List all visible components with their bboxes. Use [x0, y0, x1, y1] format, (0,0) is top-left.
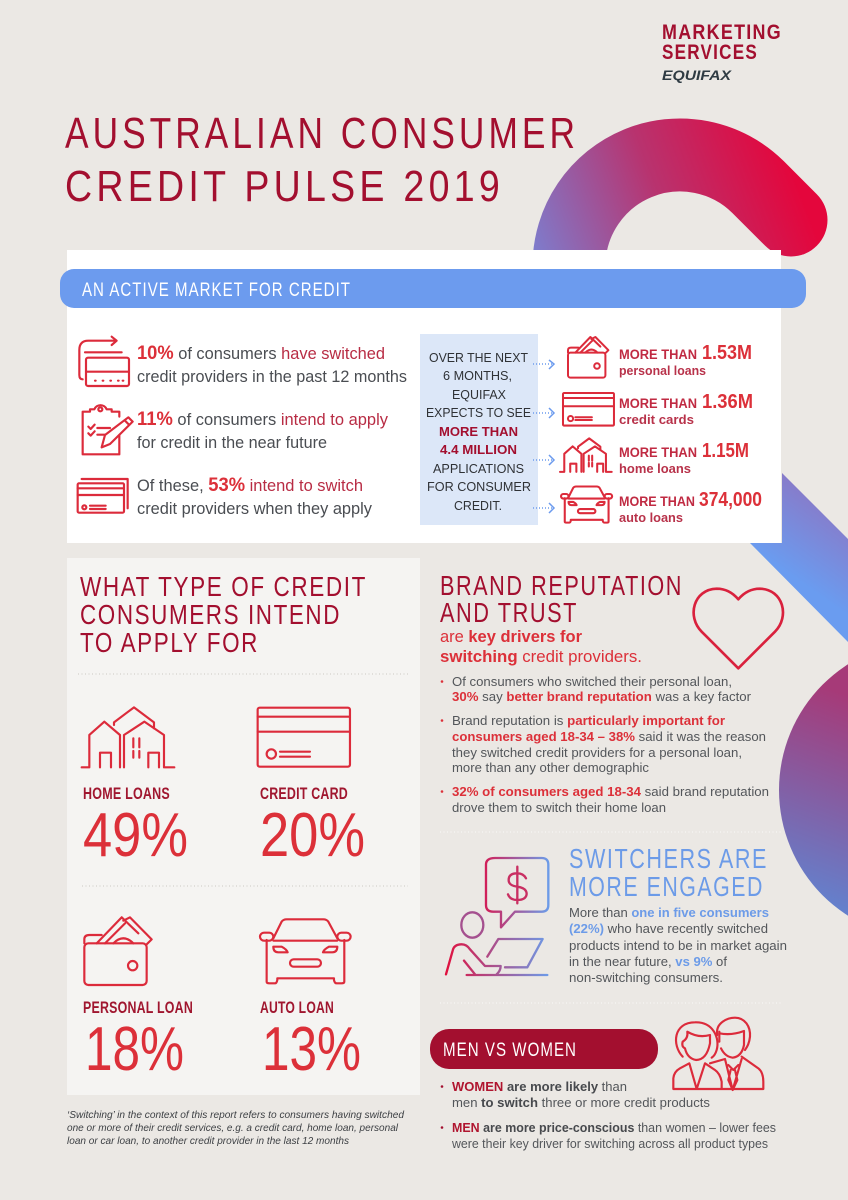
heading bar: an active market for credit: AN ACTIVE MARKET FOR CREDIT [82, 280, 351, 301]
heading bar: men vs women [430, 1029, 658, 1069]
icon: homes small [560, 438, 612, 472]
stat: credit cards: 1.36M [702, 391, 753, 413]
text: one in five consumers [569, 905, 787, 985]
stat: 10 percent switched: credit providers in the past 12 months [137, 367, 407, 386]
icon: man and woman [673, 1018, 763, 1090]
title: CREDIT PULSE 2019 [65, 162, 504, 211]
logo: Marketing Services Equifax: EQUIFAX [662, 67, 733, 83]
callout: 4.4 million applications: CREDIT. [454, 498, 502, 513]
bullet: women more likely to switch: WOMEN are more likely than [452, 1079, 627, 1094]
bullet: men more price-conscious: were their key driver for switching across all product types [451, 1136, 768, 1151]
footnote: ‘Switching’ in the context of this report refers to consumers having switched [67, 1109, 405, 1121]
heading: brand reputation and trust: AND TRUST [440, 597, 578, 628]
stat: auto loan 13 percent: AUTO LOAN [260, 998, 334, 1017]
icon: wallet [84, 917, 152, 985]
icon: credit cards [78, 479, 128, 513]
callout: 4.4 million applications: OVER THE NEXT [429, 350, 528, 365]
text: one in five consumers: More than one in five consumers [569, 905, 769, 920]
callout: 4.4 million applications: EQUIFAX [452, 387, 506, 402]
logo: Marketing Services Equifax: SERVICES [662, 41, 758, 64]
stat: home loans: 1.15M [702, 440, 749, 462]
callout: 4.4 million applications: 6 MONTHS, [443, 368, 512, 383]
bullet: important for ages 18-34: more than any other demographic [452, 760, 649, 775]
stat: credit cards: MORE THAN [619, 396, 697, 411]
heading: brand reputation and trust: switching credit providers. [440, 647, 642, 666]
stat: auto loans: auto loans [619, 511, 683, 525]
stat: personal loans: 1.53M [702, 342, 752, 364]
text: one in five consumers: in the near future, vs 9% of [569, 954, 727, 969]
stat: home loans 49 percent: 49% [83, 801, 188, 870]
bullet: women more likely to switch: men to switch three or more credit products [452, 1095, 710, 1110]
icon: heart [694, 589, 783, 668]
stat: auto loan 13 percent [260, 919, 361, 1084]
bullet: 32 percent home loan [441, 784, 769, 815]
heading bar: an active market for credit [60, 269, 806, 308]
decorative diagonal band [750, 473, 848, 642]
heading: what type of credit consumers intend to apply for: WHAT TYPE OF CREDIT [80, 571, 367, 602]
text: one in five consumers: (22%) who have recently switched [569, 921, 768, 936]
stat: 10 percent switched [137, 343, 407, 386]
stat: credit card 20 percent: 20% [260, 801, 365, 870]
callout: 4.4 million applications: FOR CONSUMER [427, 479, 531, 494]
icon: switching card [79, 337, 129, 386]
stat: credit card 20 percent: CREDIT CARD [260, 784, 348, 803]
section: men vs women [430, 1018, 776, 1151]
stat: home loans: home loans [619, 462, 691, 476]
stat: home loans [619, 440, 749, 476]
bullet: important for ages 18-34: they switched credit providers for a personal loan, [452, 745, 742, 760]
title [65, 109, 579, 211]
icon: credit card small [563, 393, 614, 426]
stat: auto loans [619, 489, 762, 525]
bullet: important for ages 18-34 [441, 713, 766, 775]
bullet: men more price-conscious: MEN are more price-conscious than women – lower fees [452, 1120, 776, 1135]
heading: switchers are more engaged: MORE ENGAGED [569, 871, 764, 902]
footnote [67, 1109, 405, 1147]
stat: 53 percent intend to switch: credit providers when they apply [137, 499, 372, 518]
stat: home loans 49 percent: HOME LOANS [83, 784, 170, 803]
stat: auto loans: MORE THAN [619, 494, 695, 509]
stat: 11 percent intend to apply [137, 409, 388, 452]
callout: 4.4 million applications: APPLICATIONS [433, 461, 524, 476]
heading: what type of credit consumers intend to apply for [80, 571, 367, 658]
stat: 11 percent intend to apply: for credit in the near future [137, 433, 327, 452]
icon: person at laptop with dollar speech bubble [446, 858, 548, 975]
stat: auto loan 13 percent: 13% [262, 1015, 361, 1084]
stat: personal loan 18 percent: PERSONAL LOAN [83, 998, 193, 1017]
heading: what type of credit consumers intend to apply for: CONSUMERS INTEND [80, 599, 341, 630]
panel: active market for credit [60, 250, 806, 543]
stat: 11 percent intend to apply: 11% of consumers intend to apply [137, 409, 388, 430]
stat: personal loan 18 percent [83, 917, 193, 1084]
stat: credit cards [619, 391, 753, 427]
stat: home loans: MORE THAN [619, 445, 697, 460]
text: one in five consumers: products intend to be in market again [569, 938, 787, 953]
title: AUSTRALIAN CONSUMER [65, 109, 579, 158]
heading: brand reputation and trust: are key drivers for [440, 627, 582, 646]
stat: 53 percent intend to switch [137, 475, 372, 518]
stat: home loans 49 percent [82, 707, 188, 870]
panel: what type of credit [67, 558, 420, 1095]
stat: credit card 20 percent [258, 708, 365, 870]
heading: switchers are more engaged: SWITCHERS ARE [569, 843, 768, 874]
callout: 4.4 million applications: EXPECTS TO SEE [426, 405, 531, 420]
heading: switchers are more engaged [569, 843, 768, 902]
callout: 4.4 million applications: 4.4 MILLION [440, 442, 517, 457]
bullet: 30 percent better brand reputation: Of consumers who switched their personal loan, [452, 674, 732, 689]
heading: brand reputation and trust [440, 570, 683, 666]
heading bar: men vs women: MEN VS WOMEN [443, 1040, 577, 1061]
callout: 4.4 million applications [420, 334, 538, 525]
section: brand reputation and trust [440, 570, 783, 815]
logo: Marketing Services Equifax: MARKETING [662, 21, 782, 44]
footnote: one or more of their credit services, e.g. a credit card, home loan, personal [67, 1122, 399, 1134]
bullet: important for ages 18-34: consumers aged 18-34 – 38% said it was the reason [452, 729, 766, 744]
bullet: men more price-conscious [441, 1120, 776, 1151]
bullet: 32 percent home loan: drove them to switch their home loan [452, 800, 666, 815]
stat: credit cards: credit cards [619, 413, 694, 427]
stat: personal loans: personal loans [619, 364, 706, 378]
stat: 10 percent switched: 10% of consumers have switched [137, 343, 385, 364]
stat: 53 percent intend to switch: Of these, 53% intend to switch [137, 475, 363, 496]
bullet: 32 percent home loan: 32% of consumers aged 18-34 said brand reputation [452, 784, 769, 799]
bullet: women more likely to switch [441, 1079, 710, 1110]
bullet: 30 percent better brand reputation [441, 674, 752, 704]
icon: car [260, 919, 351, 983]
icon: wallet small [568, 337, 608, 378]
icon: credit card [258, 708, 350, 767]
section: switchers are more engaged [446, 843, 787, 985]
logo: Marketing Services Equifax [662, 21, 782, 83]
text: one in five consumers: non-switching consumers. [569, 970, 723, 985]
stat: personal loan 18 percent: 18% [85, 1015, 184, 1084]
icon: clipboard and pencil [83, 405, 133, 454]
stat: personal loans [619, 342, 752, 378]
callout: 4.4 million applications: MORE THAN [439, 424, 518, 439]
decorative circle [779, 641, 848, 939]
stat: auto loans: 374,000 [699, 489, 762, 511]
bullet: 30 percent better brand reputation: 30% say better brand reputation was a key factor [452, 689, 752, 704]
icon: car small [561, 487, 612, 523]
arrows: callout to loan types [533, 360, 554, 513]
stat: personal loans: MORE THAN [619, 347, 697, 362]
bullet: important for ages 18-34: Brand reputation is particularly important for [452, 713, 725, 728]
footnote: loan or car loan, to another credit provider in the last 12 months [67, 1135, 350, 1147]
icon: homes [82, 707, 174, 767]
heading: what type of credit consumers intend to apply for: TO APPLY FOR [80, 627, 259, 658]
decorative arc: red to purple gradient [569, 155, 791, 290]
heading: brand reputation and trust: BRAND REPUTATION [440, 570, 683, 601]
